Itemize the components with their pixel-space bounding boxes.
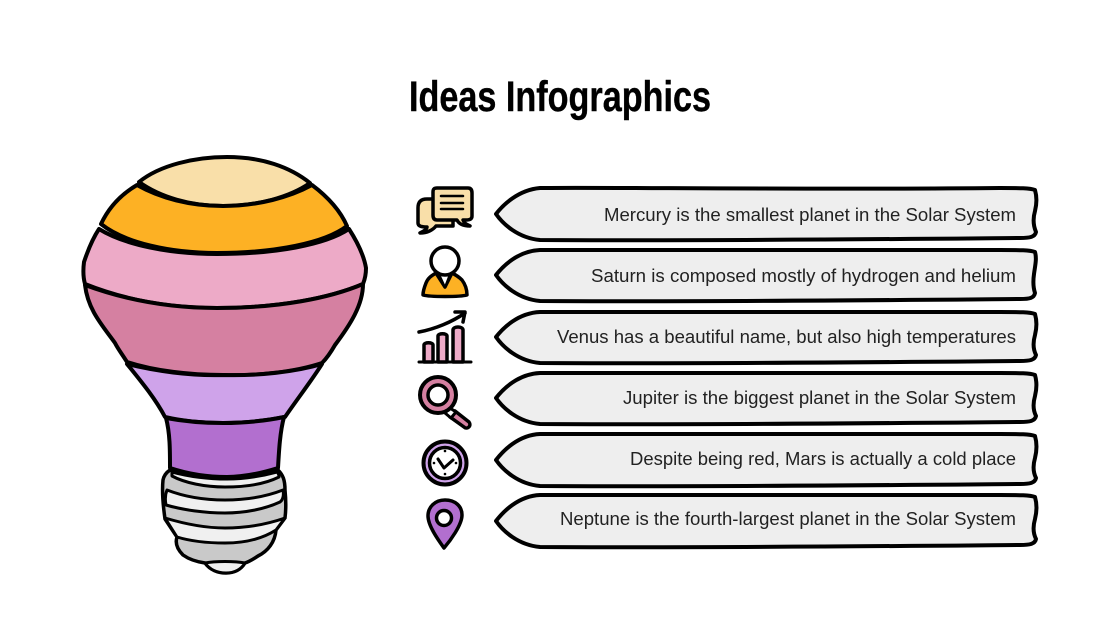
- bulb segment: lavender: [127, 364, 322, 423]
- base: light thread 2: [165, 490, 283, 513]
- bulb segment: cream cap: [139, 157, 310, 206]
- banner 2 text: Saturn is composed mostly of hydrogen and helium: [591, 266, 1016, 286]
- bulb base: screw thread: [163, 470, 286, 573]
- icon: clock: [424, 442, 466, 484]
- base: light thread 3: [165, 518, 285, 543]
- banner 6: [496, 495, 1036, 547]
- title: Ideas Infographics: [409, 73, 711, 121]
- banner 4 text: Jupiter is the biggest planet in the Solar System: [623, 388, 1016, 408]
- base: screw outline: [163, 470, 286, 573]
- banner 4: [496, 373, 1036, 424]
- icon: growth chart: [419, 312, 471, 362]
- bulb segment: light pink: [83, 229, 366, 308]
- banner 6 text: Neptune is the fourth-largest planet in the Solar System: [560, 509, 1016, 529]
- bulb segment: purple: [166, 417, 284, 477]
- banner 2: [496, 250, 1036, 301]
- icon: person: [423, 247, 467, 296]
- icon: map pin: [428, 500, 462, 548]
- bulb segment: dark pink: [85, 284, 363, 375]
- banner 3 text: Venus has a beautiful name, but also high temperatures: [557, 327, 1016, 347]
- bulb segment: orange: [101, 185, 347, 253]
- banner 1 text: Mercury is the smallest planet in the Solar System: [604, 205, 1016, 225]
- icon: speech bubbles: [418, 188, 472, 233]
- illustration: light bulb: [83, 157, 366, 573]
- base: light thread 1: [172, 472, 279, 487]
- icon: magnifying glass: [420, 377, 470, 428]
- base: tip: [205, 562, 245, 573]
- banner 5 text: Despite being red, Mars is actually a cold place: [630, 449, 1016, 469]
- banner 3: [496, 312, 1036, 363]
- banner 5: [496, 434, 1036, 486]
- banner 1: [496, 188, 1036, 240]
